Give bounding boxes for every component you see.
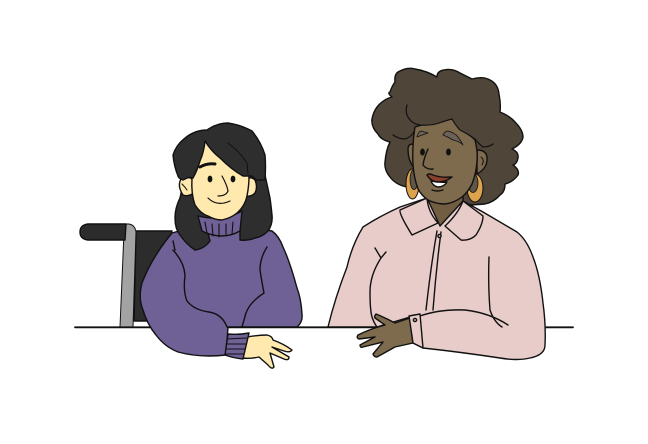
person: woman in purple sweater bbox=[140, 123, 302, 368]
hair fringe lines bbox=[393, 105, 493, 147]
wheelchair handle bbox=[80, 224, 126, 240]
hair fringe fill bbox=[407, 100, 484, 147]
person: woman in pink shirt bbox=[328, 68, 545, 359]
neck bbox=[426, 195, 463, 228]
hand bbox=[357, 314, 413, 357]
shirt bbox=[328, 198, 545, 360]
nose bbox=[423, 149, 433, 169]
wheelchair post bbox=[120, 224, 136, 327]
face bbox=[413, 119, 477, 204]
wheelchair back bbox=[134, 231, 172, 321]
collar bbox=[400, 198, 483, 240]
eyebrow bbox=[200, 164, 215, 167]
eyebrows bbox=[417, 131, 463, 145]
chin line bbox=[432, 190, 443, 191]
forearm line bbox=[420, 310, 508, 325]
cuff bbox=[225, 333, 249, 359]
nose and smile bbox=[208, 176, 230, 203]
hand bbox=[242, 335, 292, 368]
top hair bbox=[173, 123, 266, 180]
right hoop bbox=[467, 174, 483, 202]
hair strand highlight bbox=[228, 143, 248, 174]
shirt details bbox=[370, 231, 502, 327]
shirt button bbox=[438, 234, 441, 238]
face bbox=[192, 141, 249, 220]
table edge bbox=[75, 326, 573, 328]
mouth bbox=[427, 174, 452, 187]
eyes bbox=[420, 148, 451, 156]
wheelchair bbox=[80, 224, 172, 327]
turtleneck bbox=[198, 211, 242, 237]
sweater fold lines bbox=[173, 241, 267, 327]
sweater bbox=[140, 225, 302, 356]
ears bbox=[408, 144, 487, 174]
ears bbox=[179, 177, 256, 196]
eyes bbox=[208, 176, 235, 182]
left hoop bbox=[406, 169, 419, 199]
back hair bbox=[175, 150, 272, 250]
cuff bbox=[409, 314, 423, 348]
earrings bbox=[406, 169, 483, 202]
curly hair bbox=[372, 68, 523, 205]
